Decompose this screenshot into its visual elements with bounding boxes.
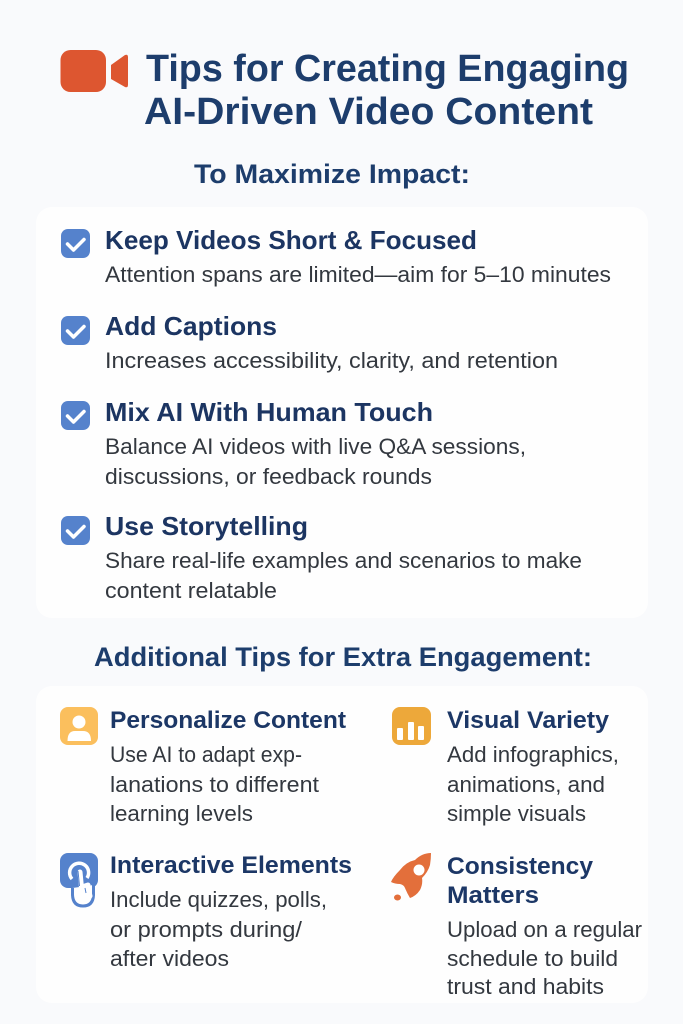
tip: add captions <box>61 311 558 373</box>
tip: visual variety: Visual Variety <box>447 707 610 734</box>
tip: mix AI with human touch <box>61 397 526 489</box>
icon: checkbox <box>61 316 90 345</box>
panel: maximize impact tips <box>36 207 648 618</box>
icon: video camera <box>60 50 128 92</box>
tip: use storytelling: content relatable <box>105 578 277 603</box>
tip: consistency matters: Upload on a regular <box>447 917 642 942</box>
tip: consistency matters: schedule to build <box>447 946 618 971</box>
title <box>144 48 629 133</box>
tip: personalize content: learning levels <box>110 801 253 826</box>
icon: rocket <box>391 853 431 900</box>
tip: interactive elements <box>60 852 352 971</box>
tip: consistency matters <box>391 853 642 999</box>
tip: visual variety: Add infographics, <box>447 742 619 767</box>
tip: mix AI with human touch: Mix AI With Human Touch <box>105 397 433 427</box>
tip: personalize content <box>60 707 346 826</box>
tip: keep videos short <box>61 225 611 287</box>
tip: mix AI with human touch: discussions, or feedback rounds <box>105 464 432 489</box>
heading: to maximize impact: To Maximize Impact: <box>194 159 470 189</box>
tip: interactive elements: or prompts during/ <box>110 917 303 942</box>
tip: interactive elements: Include quizzes, polls, <box>110 887 327 912</box>
tip: visual variety <box>392 707 619 826</box>
tip: keep videos short: Attention spans are limited—aim for 5–10 minutes <box>105 262 611 287</box>
tip: consistency matters: Consistency <box>447 853 594 880</box>
tip: personalize content: Use AI to adapt exp- <box>110 742 302 767</box>
tip: interactive elements: after videos <box>110 946 229 971</box>
tip: use storytelling <box>61 511 582 603</box>
panel: additional tips <box>36 686 648 1003</box>
tip: add captions: Increases accessibility, clarity, and retention <box>105 348 558 373</box>
tip: interactive elements: Interactive Elements <box>110 852 352 879</box>
tip: use storytelling: Share real-life examples and scenarios to make <box>105 548 582 573</box>
tip: visual variety: simple visuals <box>447 801 586 826</box>
tip: mix AI with human touch: Balance AI videos with live Q&A sessions, <box>105 434 526 459</box>
icon: checkbox <box>61 401 90 430</box>
tip: keep videos short: Keep Videos Short & Focused <box>105 225 477 255</box>
icon: checkbox <box>61 516 90 545</box>
icon: person <box>60 707 98 745</box>
icon: checkbox <box>61 229 90 258</box>
title: AI-Driven Video Content <box>144 91 593 133</box>
icon: tap finger <box>60 853 98 906</box>
tip: personalize content: Personalize Content <box>110 707 346 734</box>
tip: consistency matters: trust and habits <box>447 974 604 999</box>
title: Tips for Creating Engaging <box>146 48 629 90</box>
tip: personalize content: lanations to different <box>110 772 319 797</box>
tip: add captions: Add Captions <box>105 311 277 341</box>
tip: consistency matters: Matters <box>447 882 539 909</box>
tip: use storytelling: Use Storytelling <box>105 511 308 541</box>
heading: additional tips: Additional Tips for Extra Engagement: <box>94 642 592 672</box>
icon: bar chart <box>392 707 431 745</box>
tip: visual variety: animations, and <box>447 772 605 797</box>
